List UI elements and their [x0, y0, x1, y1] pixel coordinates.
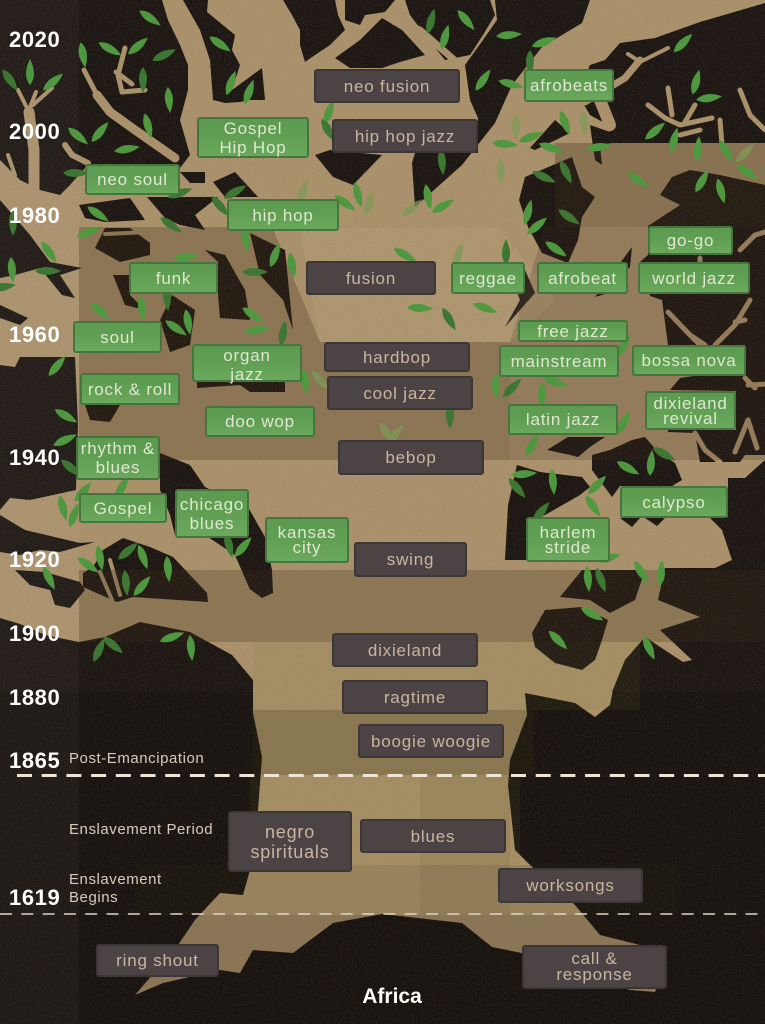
period label: enslavement begins: Begins — [69, 889, 118, 906]
year axis labels: 2000 — [9, 119, 60, 144]
year axis labels: 1940 — [9, 445, 60, 470]
green genre labels: mainstream — [511, 352, 607, 370]
year axis labels: 1880 — [9, 685, 60, 710]
green genre labels: soul — [100, 328, 135, 346]
dark genre labels: call & — [571, 949, 618, 968]
darker leaves — [0, 7, 677, 663]
period label: enslavement begins — [69, 871, 162, 906]
green genre labels: bossa nova — [642, 351, 736, 370]
year axis labels: 1865 — [9, 748, 60, 773]
period label: enslavement begins: Enslavement — [69, 871, 162, 888]
green genre labels: revival — [663, 408, 718, 428]
dark genre labels: hardbop — [363, 348, 431, 366]
green genre labels: free jazz — [537, 322, 609, 340]
dark genre labels: boogie woogie — [371, 732, 491, 750]
green genre labels: go-go — [667, 231, 714, 250]
green genre labels: afrobeats — [530, 76, 608, 95]
dark genre labels: cool jazz — [363, 384, 437, 402]
green genre labels: world jazz — [652, 268, 736, 288]
year axis labels: 2020 — [9, 27, 60, 52]
dark genre labels: ragtime — [384, 688, 446, 706]
dark genre labels: bebop — [385, 448, 437, 467]
green genre labels: organ — [223, 346, 271, 365]
period label: post-emancipation: Post-Emancipation — [69, 750, 204, 767]
green genre labels: harlem — [540, 522, 596, 542]
green genre labels: Gospel — [224, 118, 282, 138]
dark genre labels: blues — [411, 826, 455, 846]
dark genre labels: neo fusion — [344, 76, 430, 96]
green genre labels: Gospel — [94, 498, 152, 518]
leaves — [7, 7, 760, 661]
green genre labels: city — [293, 538, 321, 557]
dark genre labels: ring shout — [116, 951, 199, 970]
dashed line: 1865 emancipation — [17, 774, 765, 777]
period label: enslavement period: Enslavement Period — [69, 821, 213, 838]
green genre labels: stride — [545, 538, 591, 556]
dark genre labels: hip hop jazz — [355, 126, 455, 146]
green genre labels: rock & roll — [88, 380, 172, 398]
year axis labels: 1900 — [9, 621, 60, 646]
year axis labels: 1980 — [9, 203, 60, 228]
green genre labels: neo soul — [97, 170, 168, 189]
green genre labels: hip hop — [252, 206, 314, 224]
year axis labels: 1619 — [9, 885, 60, 910]
thin branches — [8, 22, 765, 600]
green genre labels: jazz — [230, 365, 264, 384]
dark genre labels: spirituals — [250, 842, 330, 862]
green genre labels: reggae — [459, 268, 517, 288]
dashed line: 1619 enslavement begins — [0, 913, 765, 915]
green genre labels: blues — [190, 514, 234, 532]
faded leaves — [295, 110, 757, 448]
green genre labels: kansas — [278, 523, 336, 542]
label: Africa: Africa — [362, 985, 422, 1008]
dark genre labels: fusion — [346, 268, 396, 288]
year axis labels — [9, 27, 60, 910]
dark genre labels: swing — [387, 550, 434, 569]
dark gaps between branches — [0, 0, 765, 692]
green genre labels: afrobeat — [548, 268, 617, 288]
green genre labels: Hip Hop — [219, 138, 287, 156]
dark genre labels: negro — [265, 822, 315, 842]
year axis labels: 1960 — [9, 322, 60, 347]
dark genre labels: dixieland — [368, 640, 442, 660]
green genre labels: dixieland — [653, 394, 728, 412]
green genre labels: rhythm & — [81, 439, 155, 458]
green genre labels: doo wop — [225, 412, 295, 431]
dark genre labels: worksongs — [526, 876, 615, 895]
green genre labels: blues — [96, 458, 140, 477]
year axis labels: 1920 — [9, 547, 60, 572]
dark genre labels: response — [556, 965, 633, 984]
green genre labels: latin jazz — [526, 410, 600, 429]
green genre labels: calypso — [642, 492, 706, 512]
green genre labels: funk — [156, 268, 191, 288]
green genre labels: chicago — [180, 494, 244, 514]
